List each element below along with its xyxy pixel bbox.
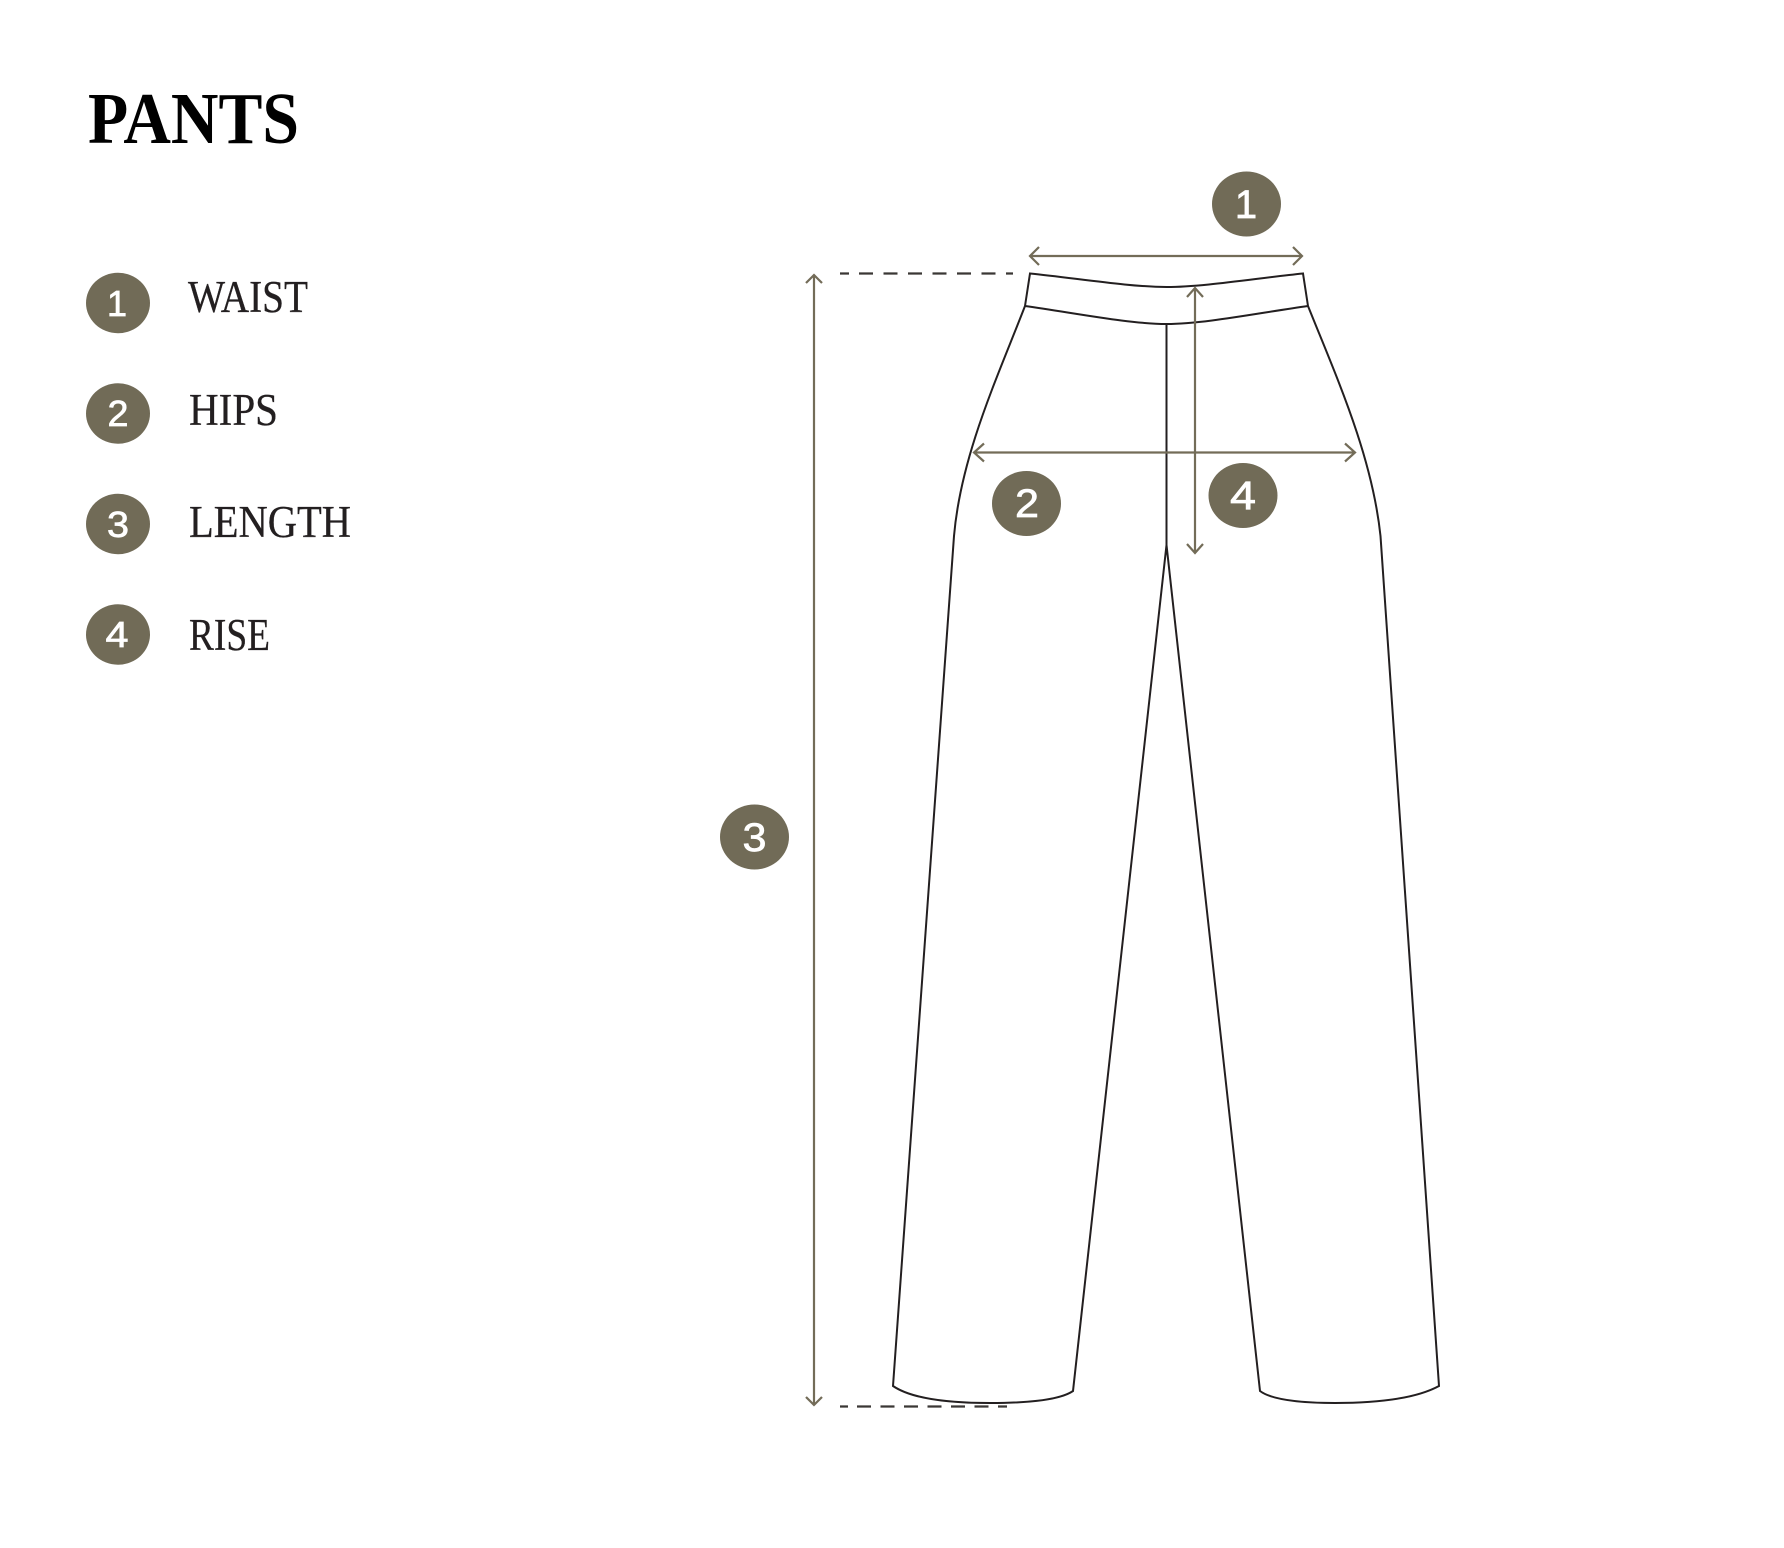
badge: waist <box>1212 172 1281 236</box>
badge: hips: 2 <box>1015 482 1039 526</box>
legend item: rise <box>86 604 270 665</box>
badge: rise: 4 <box>1230 474 1256 518</box>
legend item: hips: HIPS <box>189 385 278 435</box>
badge: waist: 1 <box>1235 183 1257 227</box>
arrow: hips <box>974 444 1355 462</box>
legend item: rise: RISE <box>189 610 270 660</box>
dashed guide: bottom <box>840 1405 1007 1408</box>
badge: length: 3 <box>742 816 766 860</box>
legend item: length: 3 <box>107 504 129 545</box>
badge: rise <box>1208 463 1278 528</box>
legend item: waist: 1 <box>107 283 127 324</box>
pants outline <box>893 274 1439 1403</box>
legend item: waist <box>86 272 308 333</box>
legend item: hips <box>86 383 278 444</box>
arrow: rise <box>1187 288 1203 553</box>
badge: hips <box>992 471 1061 536</box>
title: PANTS <box>88 78 299 159</box>
legend item: hips: 2 <box>108 393 128 434</box>
arrow: waist <box>1030 247 1302 265</box>
arrow: length <box>806 275 822 1405</box>
legend item: waist: WAIST <box>188 272 308 322</box>
legend item: rise: 4 <box>106 614 128 655</box>
badge: length <box>720 804 789 870</box>
dashed guide: top <box>840 272 1013 275</box>
legend <box>86 272 351 665</box>
legend item: length <box>86 494 351 554</box>
legend item: length: LENGTH <box>189 497 351 547</box>
